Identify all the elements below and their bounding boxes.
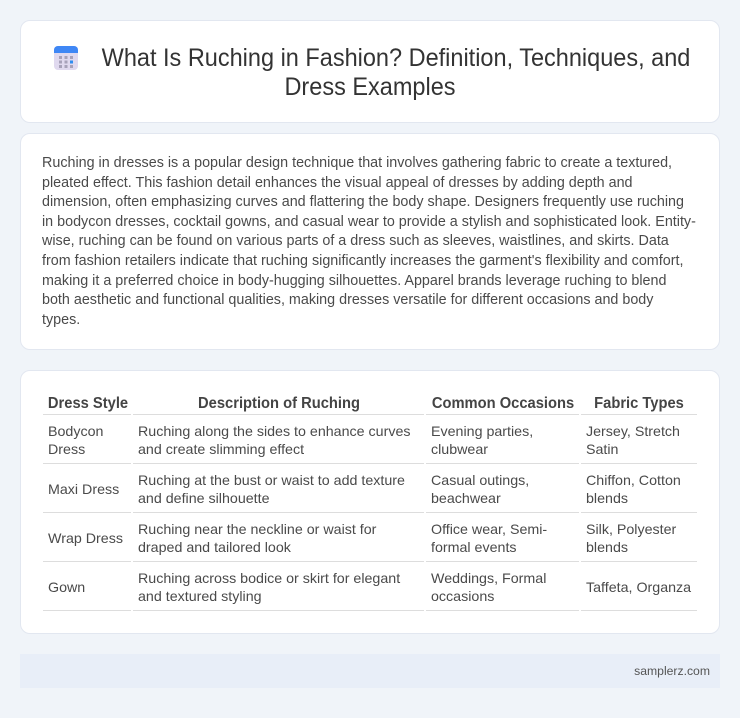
- table header: [48, 395, 684, 412]
- footer text: samplerz.com: [634, 664, 710, 678]
- intro text: types.: [42, 312, 80, 328]
- intro text: in bodycon dresses, cocktail gowns, and casual wear to provide a stylish and sophisticated look. Entity-: [42, 214, 696, 230]
- row: wrap: Office wear, Semi-: [431, 522, 547, 538]
- title: [101, 44, 690, 101]
- intro text: both aesthetic and functional qualities, making dresses versatile for different occasions and body: [42, 292, 653, 308]
- row: gown: and textured styling: [138, 589, 262, 605]
- row: gown: Taffeta, Organza: [586, 580, 691, 596]
- intro text: dimension, often emphasizing curves and flattering the body shape. Designers frequently use ruching: [42, 194, 684, 210]
- row: gown: Gown: [48, 580, 85, 596]
- row: maxi: Chiffon, Cotton: [586, 473, 681, 489]
- row: gown: [48, 571, 692, 605]
- intro text: making it a preferred choice in body-hugging silhouettes. Apparel brands leverage ruching to blend: [42, 273, 666, 289]
- row: bodycon: Satin: [586, 442, 618, 458]
- header card: [20, 20, 720, 123]
- row: bodycon: clubwear: [431, 442, 488, 458]
- row: wrap: blends: [586, 540, 628, 556]
- icon: calendar: [54, 46, 78, 70]
- row: maxi: Ruching at the bust or waist to add texture: [138, 473, 405, 489]
- footer bar: [20, 654, 720, 688]
- table card: [20, 370, 720, 634]
- intro text: from fashion retailers indicate that ruching significantly increases the garment's flexibility and comfort,: [42, 253, 683, 269]
- intro text: wise, ruching can be found on various parts of a dress such as sleeves, waistlines, and skirts. Data: [42, 233, 669, 249]
- row: gown: Ruching across bodice or skirt for elegant: [138, 571, 400, 587]
- row: gown: occasions: [431, 589, 494, 605]
- row: bodycon: Dress: [48, 442, 85, 458]
- row: bodycon: Bodycon: [48, 424, 103, 440]
- table: [43, 395, 697, 611]
- title: Dress Examples: [284, 73, 456, 101]
- table header: Dress Style: [48, 395, 128, 412]
- table header: Common Occasions: [432, 395, 574, 412]
- table header: Fabric Types: [594, 395, 684, 412]
- row: bodycon: Evening parties,: [431, 424, 533, 440]
- row: maxi: and define silhouette: [138, 491, 270, 507]
- table header: Description of Ruching: [198, 395, 360, 412]
- intro card: [20, 133, 720, 350]
- intro text: Ruching in dresses is a popular design technique that involves gathering fabric to create a textured,: [42, 155, 672, 171]
- row: wrap: Silk, Polyester: [586, 522, 676, 538]
- row: gown: Weddings, Formal: [431, 571, 546, 587]
- row: maxi: beachwear: [431, 491, 501, 507]
- row: bodycon: and create slimming effect: [138, 442, 304, 458]
- title: What Is Ruching in Fashion? Definition, Techniques, and: [101, 44, 690, 72]
- row: bodycon: Jersey, Stretch: [586, 424, 680, 440]
- row: maxi: [48, 473, 681, 507]
- row: maxi: Casual outings,: [431, 473, 529, 489]
- intro text: pleated effect. This fashion detail enhances the visual appeal of dresses by adding depth and: [42, 175, 633, 191]
- row: wrap: [48, 522, 676, 556]
- row: wrap: Wrap Dress: [48, 531, 123, 547]
- row: bodycon: [48, 424, 680, 458]
- row: wrap: Ruching near the neckline or waist for: [138, 522, 376, 538]
- intro text: [42, 155, 696, 328]
- row: wrap: formal events: [431, 540, 517, 556]
- row: maxi: Maxi Dress: [48, 482, 119, 498]
- row: maxi: blends: [586, 491, 628, 507]
- row: bodycon: Ruching along the sides to enhance curves: [138, 424, 411, 440]
- row: wrap: draped and tailored look: [138, 540, 291, 556]
